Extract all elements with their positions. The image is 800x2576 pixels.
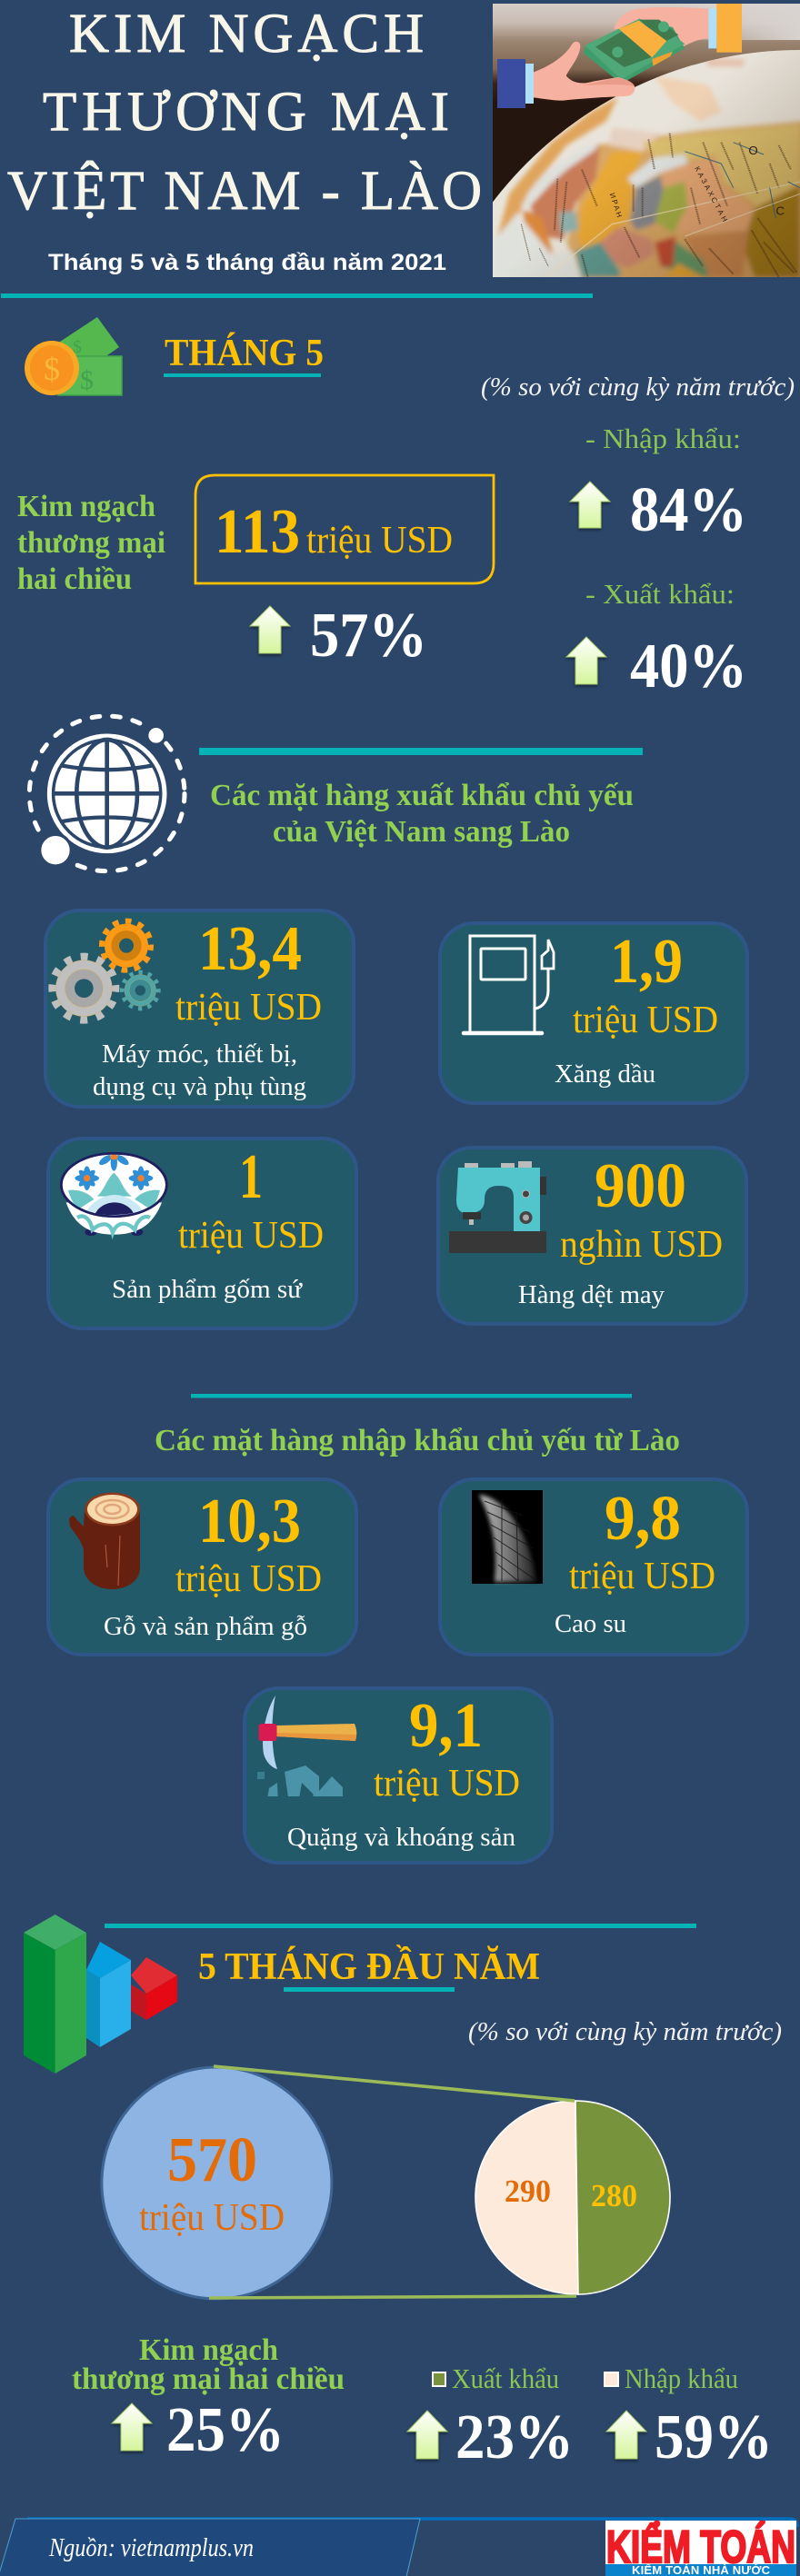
panel: petroleum: Xăng dầu — [555, 1059, 655, 1089]
icon: globe with orbit — [29, 716, 185, 871]
panel: ceramics — [48, 1139, 356, 1328]
panel: machinery: 13,4 — [198, 914, 302, 984]
icon: pickaxe and rocks — [257, 1696, 356, 1804]
connector lines between circle and pie — [209, 2066, 576, 2298]
legend: Xuất khẩu — [452, 2362, 559, 2394]
heading: main exports: Các mặt hàng xuất khẩu chủ yếu — [210, 779, 634, 812]
panel: machinery: triệu USD — [175, 987, 322, 1029]
icon: ceramic bowl — [61, 1153, 166, 1236]
icon: log — [69, 1492, 140, 1589]
title: VIỆT NAM - LÀO — [7, 161, 482, 222]
icon: 3D bars — [24, 1915, 177, 2074]
stat: import up 59%: 59% — [655, 2402, 773, 2472]
label: Kim ngạch thương mại hai chiều: thương mại — [17, 526, 165, 560]
panel: petroleum — [440, 923, 747, 1103]
chart: export-import pie — [475, 2101, 670, 2294]
note: comparison basis: (% so với cùng kỳ năm trước) — [468, 2017, 782, 2046]
title — [7, 4, 482, 222]
stat: export up 40%: 40% — [630, 632, 747, 701]
panel: textiles — [438, 1148, 746, 1324]
panel: textiles: 900 — [595, 1151, 686, 1221]
icon: coin and banknotes: $ — [73, 337, 82, 357]
chart: total circle — [102, 2067, 332, 2299]
panel: machinery — [45, 910, 354, 1107]
panel: rubber: triệu USD — [569, 1556, 715, 1597]
chart: export-import pie: 280 — [591, 2178, 637, 2213]
stat: export up 40%: - Xuất khẩu: — [585, 578, 735, 610]
panel: rubber — [440, 1479, 747, 1655]
panel: total value May: 113 — [215, 497, 300, 567]
icon: coin and banknotes — [25, 317, 122, 395]
stat: total five months up 25%: Kim ngạch — [139, 2333, 278, 2367]
panel: wood: 10,3 — [198, 1487, 301, 1557]
label: Kim ngạch thương mại hai chiều: Kim ngạch — [17, 490, 155, 523]
heading: Tháng 5: THÁNG 5 — [165, 332, 324, 374]
panel: rubber: Cao su — [555, 1609, 626, 1638]
legend — [433, 2362, 738, 2394]
panel: rubber: 9,8 — [605, 1484, 681, 1554]
label: Kim ngạch thương mại hai chiều — [17, 490, 165, 596]
footer — [0, 2519, 797, 2576]
panel: wood: triệu USD — [175, 1558, 322, 1600]
stat: export up 23%: 23% — [455, 2402, 574, 2472]
source: Nguồn: vietnamplus.vn — [48, 2533, 254, 2562]
stat: total five months up 25%: thương mại hai chiều — [72, 2362, 345, 2396]
chart: total circle: triệu USD — [139, 2197, 285, 2239]
stat: import up 84%: - Nhập khẩu: — [585, 423, 741, 454]
heading: main imports: Các mặt hàng nhập khẩu chủ yếu từ Lào — [155, 1424, 680, 1457]
stat: total five months up 25%: 25% — [166, 2395, 285, 2465]
panel: textiles: Hàng dệt may — [518, 1280, 665, 1309]
panel: wood — [48, 1479, 356, 1655]
photo: globe with hands exchanging money: КАЗАХСТАН — [693, 165, 730, 225]
panel: machinery: Máy móc, thiết bị, — [102, 1039, 297, 1069]
title: THƯƠNG MẠI — [43, 82, 449, 143]
label: Kim ngạch thương mại hai chiều: hai chiều — [17, 562, 132, 596]
stat: total five months up 25% — [72, 2333, 345, 2465]
panel: petroleum: 1,9 — [610, 927, 683, 997]
legend: Nhập khẩu — [625, 2362, 738, 2394]
panel: ceramics: triệu USD — [178, 1215, 324, 1257]
title: KIM NGẠCH — [69, 4, 424, 65]
chart: total circle: 570 — [167, 2125, 257, 2195]
photo: globe with hands exchanging money: C — [775, 204, 785, 218]
stat: total up 57%: 57% — [310, 601, 427, 671]
panel: ores: triệu USD — [374, 1763, 520, 1805]
panel: ceramics: 1 — [239, 1142, 263, 1212]
panel: ores: 9,1 — [409, 1691, 483, 1761]
stat: export up 40% — [566, 578, 747, 701]
stat: import up 59% — [606, 2402, 773, 2472]
panel: total value May: triệu USD — [306, 520, 453, 562]
icon: coin and banknotes: $ — [80, 365, 94, 395]
heading: first 5 months: 5 THÁNG ĐẦU NĂM — [198, 1944, 540, 1988]
subtitle: Tháng 5 và 5 tháng đầu năm 2021 — [48, 250, 446, 275]
panel: machinery: dụng cụ và phụ tùng — [93, 1072, 306, 1101]
stat: import up 84% — [570, 423, 747, 545]
panel: ceramics: Sản phẩm gốm sứ — [112, 1275, 303, 1304]
heading: main exports: của Việt Nam sang Lào — [273, 815, 570, 849]
photo: globe with hands exchanging money — [493, 4, 800, 277]
photo: globe with hands exchanging money: O — [748, 144, 758, 157]
stat: export up 23% — [407, 2402, 574, 2472]
note: comparison basis: (% so với cùng kỳ năm trước) — [481, 373, 795, 402]
stat: total up 57% — [250, 601, 427, 671]
stat: import up 84%: 84% — [630, 475, 747, 545]
icon: right hand with cuff — [615, 4, 742, 53]
icon: coin and banknotes: $ — [44, 351, 60, 387]
panel: petroleum: triệu USD — [573, 1000, 718, 1041]
icon: sewing machine — [449, 1161, 546, 1253]
panel: wood: Gỗ và sản phẩm gỗ — [104, 1612, 307, 1641]
panel: ores — [245, 1688, 552, 1863]
icon: fuel pump — [464, 936, 554, 1033]
icon: left hand with cuff — [497, 42, 635, 108]
chart: export-import pie: 290 — [505, 2173, 551, 2209]
photo: globe with hands exchanging money: ИРАН — [608, 192, 624, 220]
icon: tyre photo — [472, 1490, 543, 1584]
icon: banknote stack — [584, 19, 685, 84]
panel: total value May — [195, 475, 494, 583]
icon: gears — [52, 921, 158, 1020]
panel: ores: Quặng và khoáng sản — [287, 1823, 515, 1852]
heading: main exports — [210, 779, 634, 849]
panel: textiles: nghìn USD — [560, 1224, 723, 1266]
